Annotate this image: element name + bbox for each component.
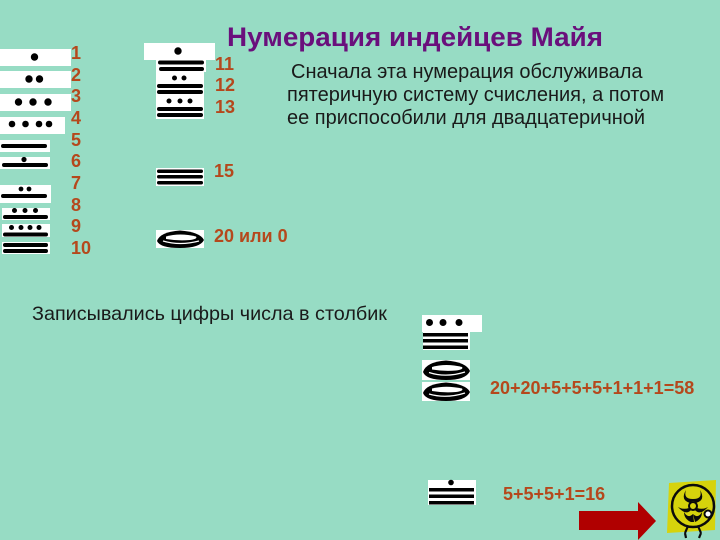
equation: 16: 5+5+5+1=16 <box>503 484 605 504</box>
labels 1 to 10: 5 <box>71 130 81 150</box>
panel: numerals 1 to 10 <box>0 49 71 254</box>
labels 1 to 10 <box>71 43 91 258</box>
numeral 10 <box>2 242 50 254</box>
numeral stack: 58 <box>422 315 482 401</box>
numeral 1 <box>0 49 71 66</box>
labels 11 to 20 <box>214 54 288 246</box>
labels 1 to 10: 2 <box>71 65 81 85</box>
labels 11 to 20: 20 или 0 <box>214 226 288 246</box>
labels 1 to 10: 1 <box>71 43 81 63</box>
labels 11 to 20: 11 <box>215 54 234 74</box>
arrow: next <box>579 502 656 540</box>
digit: 3 and three bars <box>422 315 482 350</box>
numeral 5 <box>0 140 50 152</box>
numeral 8 <box>2 208 50 220</box>
text block: description: пятеричную систему счисления, а потом <box>287 84 664 106</box>
text block: description: ее приспособили для двадцатеричной <box>287 107 645 129</box>
digit: shell <box>422 360 470 380</box>
digit: shell <box>422 382 470 401</box>
numeral 13 <box>156 96 204 119</box>
numeral: 16 <box>428 480 476 505</box>
labels 1 to 10: 3 <box>71 86 81 106</box>
numeral 2 <box>0 71 71 88</box>
numeral 6 <box>0 157 50 169</box>
labels 1 to 10: 6 <box>71 151 81 171</box>
numeral 9 <box>2 224 50 237</box>
text block: description: Сначала эта нумерация обслуживала <box>291 61 643 83</box>
labels 1 to 10: 7 <box>71 173 81 193</box>
numeral 15 <box>156 168 204 186</box>
labels 1 to 10: 8 <box>71 195 81 215</box>
title: Нумерация индейцев Майя <box>227 22 603 52</box>
numeral 4 <box>0 117 65 134</box>
numeral 12 <box>156 72 204 96</box>
numeral 20 shell <box>156 230 204 248</box>
numeral 11 <box>144 43 215 72</box>
text block: description <box>287 61 664 129</box>
text block: columns note: Записывались цифры числа в столбик <box>32 303 387 325</box>
equation: 58: 20+20+5+5+5+1+1+1=58 <box>490 378 694 398</box>
labels 1 to 10: 9 <box>71 216 81 236</box>
labels 11 to 20: 13 <box>215 97 235 117</box>
labels 1 to 10: 10 <box>71 238 91 258</box>
labels 11 to 20: 12 <box>215 75 235 95</box>
numeral 3 <box>0 94 71 111</box>
labels 11 to 20: 15 <box>214 161 234 181</box>
icon: biohazard figure <box>667 480 716 538</box>
labels 1 to 10: 4 <box>71 108 81 128</box>
panel: numerals 11 to 20 <box>144 43 215 248</box>
numeral 7 <box>0 185 51 203</box>
